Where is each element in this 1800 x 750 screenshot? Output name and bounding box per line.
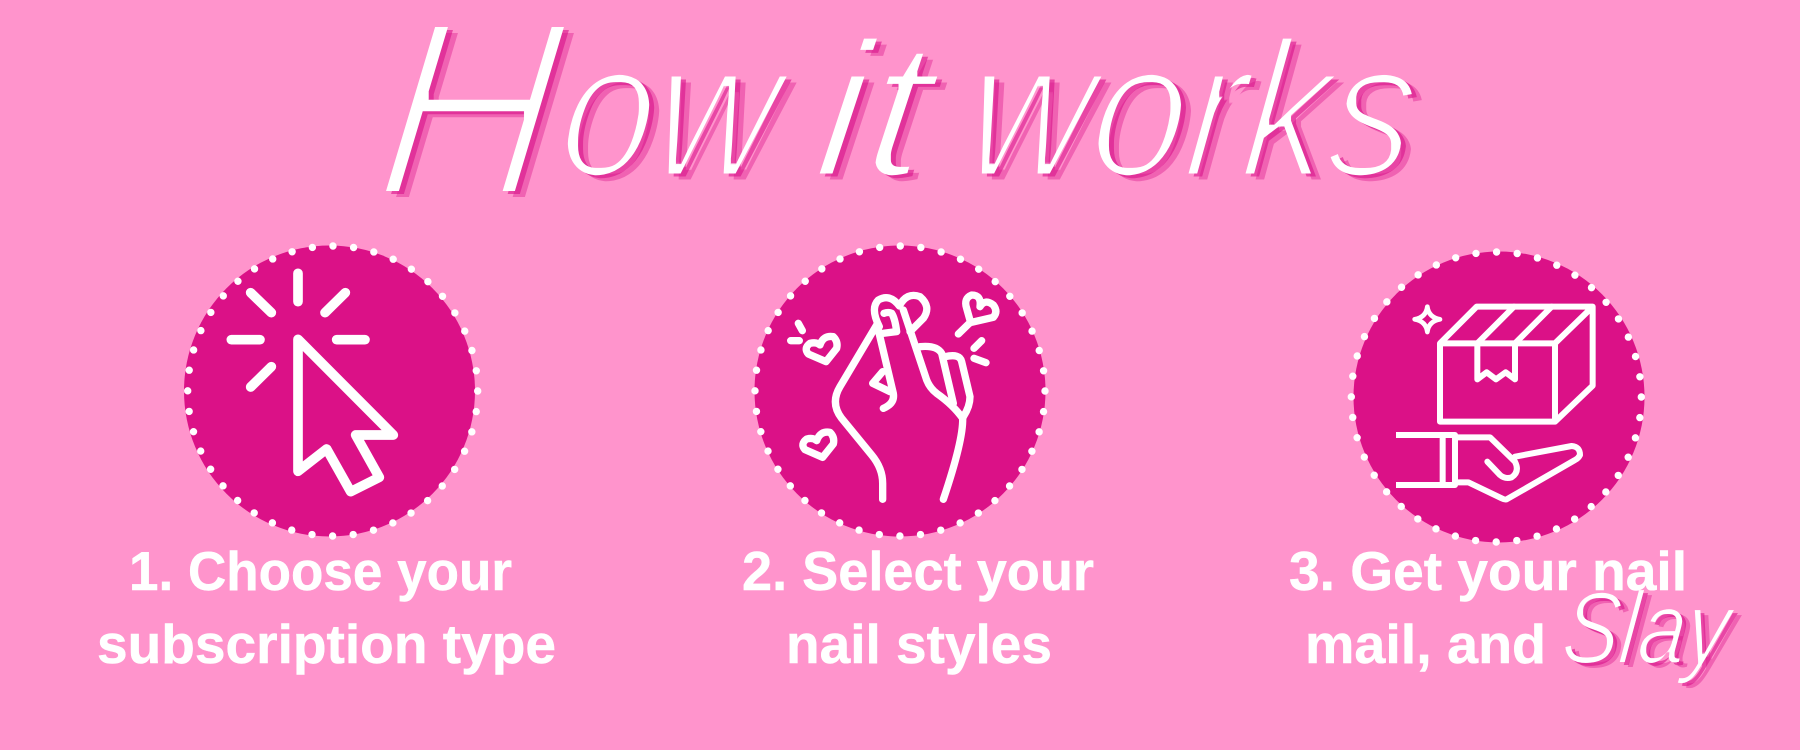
title: ow — [552, 2, 800, 218]
title: it — [808, 2, 950, 218]
title — [366, 0, 1428, 249]
panel: step 2 — [742, 246, 1094, 675]
panel: step 1 — [97, 246, 556, 675]
step 1 label: subscription type — [97, 613, 556, 675]
dotted ring 1 — [188, 246, 478, 536]
dotted ring 3 — [1351, 252, 1641, 542]
step 3 label — [1289, 540, 1687, 675]
step 3 label: 3. Get your nail — [1289, 540, 1687, 602]
dotted ring 2 — [755, 246, 1045, 536]
step 2 label: 2. Select your — [742, 540, 1094, 602]
panel: step 3 — [1289, 252, 1741, 685]
step 2 label: nail styles — [786, 613, 1052, 675]
step 3 label: mail, and — [1305, 613, 1546, 675]
icon: finger heart hand — [791, 295, 996, 499]
badge circle 2 — [754, 246, 1046, 536]
badge circle 3 — [1354, 252, 1644, 542]
step 1 label — [97, 540, 556, 675]
step 2 label — [742, 540, 1094, 675]
title: works — [959, 2, 1428, 218]
step 1 label: 1. Choose your — [129, 540, 512, 602]
badge circle 1 — [184, 246, 475, 536]
icon: mouse cursor click — [231, 273, 393, 492]
icon: box over open hand — [1396, 307, 1593, 500]
script word: Slay: Slay — [1558, 570, 1741, 685]
